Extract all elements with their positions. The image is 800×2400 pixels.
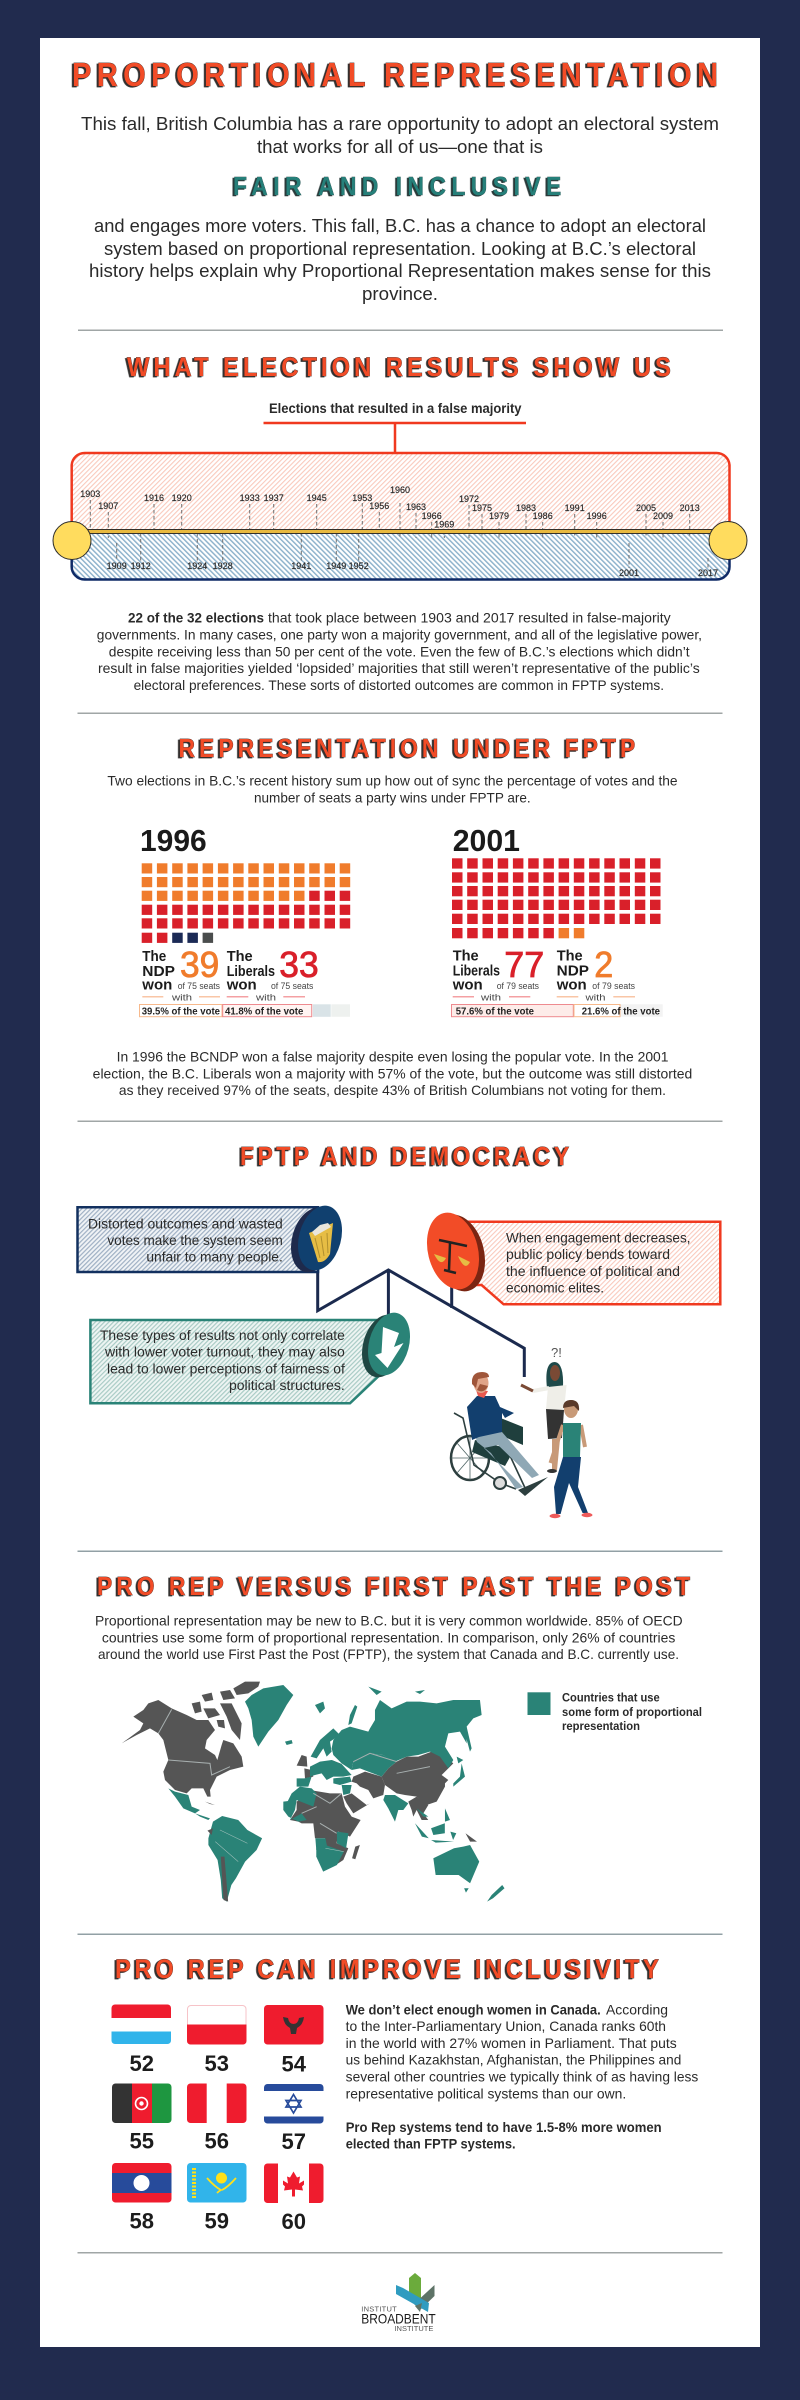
years below the line: 1949: [326, 561, 346, 571]
man in wheelchair: [451, 1372, 548, 1496]
logo wordmark: INSTITUT: [361, 2305, 397, 2314]
years above the line: 1963: [406, 502, 426, 512]
NDP result 2001: with: [584, 992, 606, 1002]
Liberal result 2001: [452, 944, 573, 1017]
years below the line: 1924: [187, 561, 207, 571]
rank numbers: 52: [129, 2051, 154, 2076]
years above the line: [80, 485, 700, 529]
south teal countries: [208, 1816, 505, 1902]
Liberal result 2001: won: [452, 976, 483, 993]
years below the line: 1952: [349, 561, 369, 571]
world comparison text: around the world use First Past the Post (FPTP), the system that Canada and B.C. currently use.: [98, 1647, 679, 1662]
callout: engagement decreases: When engagement decreases,: [506, 1230, 690, 1245]
intro text bottom: history helps explain why Proportional Representation makes sense for this: [89, 261, 711, 281]
south dark countries: [207, 1828, 477, 1902]
speech exclamation: ?!: [551, 1345, 562, 1360]
timeline outlines: [72, 453, 729, 531]
years above the line: 1966: [422, 511, 442, 521]
year 1996: 1996: [140, 823, 207, 858]
NDP result 2001: NDP: [557, 963, 589, 980]
map legend: Countries that use: [562, 1691, 660, 1705]
years above the line: 1986: [533, 511, 553, 521]
women in parliament text: in the world with 27% women in Parliament. That puts: [346, 2036, 677, 2051]
illustration: people and wheelchair: [451, 1345, 592, 1518]
false majority paragraph: [97, 611, 702, 693]
NDP result 1996: won: [141, 976, 172, 993]
years above the line: 1991: [565, 503, 585, 513]
years below the line: 1941: [291, 561, 311, 571]
callout: distorted outcomes: [78, 1207, 318, 1272]
NDP result 1996: The: [142, 948, 166, 965]
flag 60 canada: [264, 2164, 324, 2204]
icon: trash can disc: [284, 1201, 349, 1277]
years below the line: 2017: [698, 568, 718, 578]
diagram: fptp and democracy: [78, 1201, 720, 1518]
fptp intro text: number of seats a party wins under FPTP are.: [254, 790, 531, 805]
Liberal result 2001: Liberals: [453, 963, 500, 980]
rank numbers: 55: [129, 2128, 154, 2153]
year 2001: 2001: [453, 823, 520, 858]
women in parliament text: [346, 2002, 698, 2152]
map legend: some form of proportional: [562, 1705, 702, 1719]
north border lines: [158, 1709, 430, 1833]
fptp outcome paragraph: In 1996 the BCNDP won a false majority despite even losing the popular vote. In the 2001: [117, 1050, 669, 1065]
Liberal result 1996: The: [227, 948, 253, 965]
flag 56 peru: [187, 2084, 247, 2124]
intro text top: This fall, British Columbia has a rare opportunity to adopt an electoral system: [81, 114, 719, 134]
Liberal result 2001: 77: [504, 944, 544, 985]
intro text bottom: and engages more voters. This fall, B.C. has a chance to adopt an electoral: [94, 216, 706, 236]
callout: engagement decreases: public policy bends toward: [506, 1247, 670, 1262]
heading: pro rep can improve inclusivity: PRO REP CAN IMPROVE INCLUSIVITY: [115, 1955, 659, 1984]
heading: fptp and democracy: FPTP AND DEMOCRACY: [240, 1143, 569, 1171]
years above the line: 1920: [172, 493, 192, 503]
hatched bands: [72, 452, 729, 580]
fptp outcome paragraph: [93, 1050, 692, 1098]
years above the line: 1903: [80, 489, 100, 499]
NDP result 2001: of 79 seats: [592, 981, 635, 991]
timeline ticks: [90, 500, 708, 568]
intro text bottom: province.: [362, 284, 438, 304]
heading: representation under fptp: REPRESENTATION UNDER FPTP: [178, 735, 635, 763]
years above the line: 1916: [144, 493, 164, 503]
icon: down arrow disc: [355, 1308, 417, 1382]
intro text bottom: [89, 216, 711, 304]
woman talking: [521, 1345, 567, 1473]
NDP result 1996: 39.5% of the vote: [142, 1006, 220, 1017]
map northern hemisphere: [122, 1682, 482, 1867]
NDP result 1996: 39: [180, 944, 219, 985]
NDP result 1996: of 75 seats: [178, 981, 220, 991]
NDP result 1996: with: [171, 992, 192, 1002]
map southern hemisphere: [207, 1816, 505, 1902]
NDP result 2001: [556, 944, 663, 1017]
flag 59 kazakhstan: [187, 2163, 247, 2203]
callout: lower turnout: political structures.: [229, 1378, 345, 1393]
logo mark: [396, 2273, 434, 2312]
years above the line: 1972: [459, 494, 479, 504]
years above the line: 2013: [680, 503, 700, 513]
years above the line: 1969: [434, 519, 454, 529]
subheading: fair and inclusive: FAIR AND INCLUSIVE: [233, 173, 561, 201]
false majority paragraph: 22 of the 32 elections: [128, 611, 264, 626]
broadbent institute logo: [361, 2273, 436, 2333]
callout: engagement decreases: [460, 1222, 720, 1304]
Liberal result 1996: won: [226, 976, 257, 993]
map legend: representation: [562, 1719, 640, 1733]
NDP result 2001: 2: [594, 944, 613, 985]
callout: lower turnout: [90, 1320, 385, 1403]
women in parliament text: several other countries we typically think of as having less: [346, 2070, 698, 2085]
years above the line: 1975: [472, 503, 492, 513]
Liberal result 1996: 33: [279, 944, 319, 985]
Liberal result 2001: of 79 seats: [497, 981, 539, 991]
world comparison text: countries use some form of proportional representation. In comparison, only 26% of countries: [102, 1630, 676, 1645]
callout: distorted outcomes: Distorted outcomes and wasted: [88, 1216, 283, 1231]
heading: what election results show us: WHAT ELECTION RESULTS SHOW US: [127, 353, 671, 382]
years below the line: 2001: [619, 568, 639, 578]
world comparison text: [95, 1614, 683, 1662]
south border lines: [215, 1830, 344, 1862]
fptp intro text: Two elections in B.C.’s recent history sum up how out of sync the percentage of votes and the: [107, 774, 678, 789]
years above the line: 2009: [653, 511, 673, 521]
flag 55 afghanistan: [112, 2084, 172, 2124]
Liberal result 1996: 41.8% of the vote: [225, 1006, 304, 1017]
map legend: [528, 1691, 702, 1733]
years above the line: 2005: [636, 503, 656, 513]
flag 58 laos: [112, 2163, 172, 2203]
false majority paragraph: result in false majorities yielded ‘lopsided’ majorities that still weren’t representative of the public’s: [98, 661, 700, 676]
years above the line: 1945: [307, 493, 327, 503]
Liberal result 1996: with: [255, 992, 276, 1002]
timeline caption: Elections that resulted in a false majority: [269, 401, 522, 416]
timeline chart: false majority elections: [53, 401, 747, 580]
rank numbers: 59: [204, 2208, 229, 2233]
callout: lower turnout: These types of results not only correlate: [100, 1328, 345, 1343]
fptp intro text: [107, 774, 678, 805]
false majority paragraph: that took place between 1903 and 2017 resulted in false-majority: [268, 611, 671, 626]
years below the line: 1909: [107, 561, 127, 571]
fptp outcome paragraph: as they received 97% of the seats, despite 43% of British Columbians not voting for them.: [119, 1083, 666, 1098]
women in parliament text: to the Inter-Parliamentary Union, Canada ranks 60th: [346, 2019, 666, 2034]
callout: distorted outcomes: votes make the system seem: [107, 1233, 283, 1248]
years above the line: 1979: [489, 511, 509, 521]
flag 52 luxembourg: [112, 2004, 172, 2044]
false majority paragraph: despite receiving less than 50 per cent of the vote. Even the few of B.C.’s elections which didn’t: [109, 644, 690, 660]
callout: lower turnout: lead to lower perceptions of fairness of: [107, 1361, 345, 1376]
years above the line: 1983: [516, 503, 536, 513]
NDP result 2001: The: [557, 948, 583, 965]
remaining vote bars 1996: [313, 1004, 350, 1017]
NDP result 2001: won: [556, 976, 587, 993]
broadbent institute logo: BROADBENT: [361, 2310, 436, 2326]
connector lines: [318, 1270, 524, 1377]
rank numbers: 57: [281, 2129, 306, 2154]
years below the line: 1928: [213, 561, 233, 571]
rank numbers: 53: [204, 2051, 229, 2076]
seat grid 2001: [452, 858, 660, 938]
NDP result 1996: NDP: [142, 963, 175, 980]
women in parliament text: representative political systems than our own.: [346, 2086, 626, 2101]
years above the line: 1960: [390, 485, 410, 495]
years below the line: [107, 561, 718, 578]
rank numbers: 60: [281, 2209, 306, 2234]
years above the line: 1956: [369, 501, 389, 511]
woman walking: [550, 1400, 592, 1518]
callout: engagement decreases: the influence of political and: [506, 1264, 680, 1279]
heading: pro rep versus first past the post: PRO REP VERSUS FIRST PAST THE POST: [97, 1573, 690, 1601]
caption bracket: [264, 423, 526, 453]
flag 53 poland: [187, 2006, 246, 2044]
flag 57 israel: [264, 2084, 324, 2124]
callout: engagement decreases: economic elites.: [506, 1281, 604, 1296]
left end circle: [53, 522, 91, 560]
years above the line: 1907: [98, 501, 118, 511]
title: PROPORTIONAL REPRESENTATION: [72, 56, 718, 93]
NDP result 1996: [140, 944, 222, 1017]
world map: [122, 1682, 505, 1902]
intro text bottom: system based on proportional representation. Looking at B.C.’s electoral: [104, 239, 696, 259]
broadbent institute logo: INSTITUTE: [394, 2324, 433, 2333]
panel: 2001 election: [452, 823, 663, 1017]
callout: lower turnout: with lower voter turnout, they may also: [104, 1345, 345, 1360]
NDP result 2001: 21.6% of the vote: [582, 1006, 660, 1017]
rank numbers: [129, 2051, 307, 2234]
Liberal result 2001: 57.6% of the vote: [456, 1006, 534, 1017]
Liberal result 2001: The: [453, 948, 479, 965]
women in parliament text: Pro Rep systems tend to have 1.5-8% more women: [346, 2120, 662, 2135]
north dark countries: [122, 1682, 453, 1867]
Liberal result 2001: with: [480, 992, 501, 1002]
women in parliament text: us behind Kazakhstan, Afghanistan, the Philippines and: [346, 2053, 681, 2068]
rank numbers: 56: [204, 2128, 229, 2153]
seat grid 1996: [142, 863, 350, 943]
flag rankings grid: [112, 2004, 324, 2234]
icon: scales disc: [419, 1207, 493, 1297]
intro text top: that works for all of us—one that is: [257, 137, 543, 157]
false majority paragraph: electoral preferences. These sorts of distorted outcomes are common in FPTP systems.: [134, 678, 664, 693]
Liberal result 1996: [223, 944, 319, 1017]
women in parliament text: We don’t elect enough women in Canada.: [346, 2002, 601, 2017]
women in parliament text: elected than FPTP systems.: [346, 2137, 516, 2152]
fptp outcome paragraph: election, the B.C. Liberals won a majority with 57% of the vote, but the outcome was still distorted: [93, 1066, 692, 1081]
world comparison text: Proportional representation may be new to B.C. but it is very common worldwide. 85% of OECD: [95, 1614, 683, 1629]
timeline axis bar: [80, 530, 722, 534]
flag 54 albania: [264, 2005, 324, 2045]
north teal countries: [168, 1685, 482, 1822]
years above the line: 1996: [587, 511, 607, 521]
Liberal result 1996: Liberals: [227, 963, 275, 980]
right end circle: [709, 522, 747, 560]
years above the line: 1933: [240, 493, 260, 503]
callout: distorted outcomes: unfair to many people.: [146, 1250, 283, 1265]
years above the line: 1937: [264, 493, 284, 503]
rank numbers: 54: [281, 2052, 307, 2077]
intro text top: [81, 114, 719, 157]
Liberal result 1996: of 75 seats: [271, 981, 314, 991]
years above the line: 1953: [352, 493, 372, 503]
panel: 1996 election: [140, 823, 350, 1017]
false majority paragraph: governments. In many cases, one party won a majority government, and all of the legislative power,: [97, 627, 702, 642]
women in parliament text: According: [606, 2002, 668, 2017]
years below the line: 1912: [131, 561, 151, 571]
rank numbers: 58: [129, 2208, 154, 2233]
